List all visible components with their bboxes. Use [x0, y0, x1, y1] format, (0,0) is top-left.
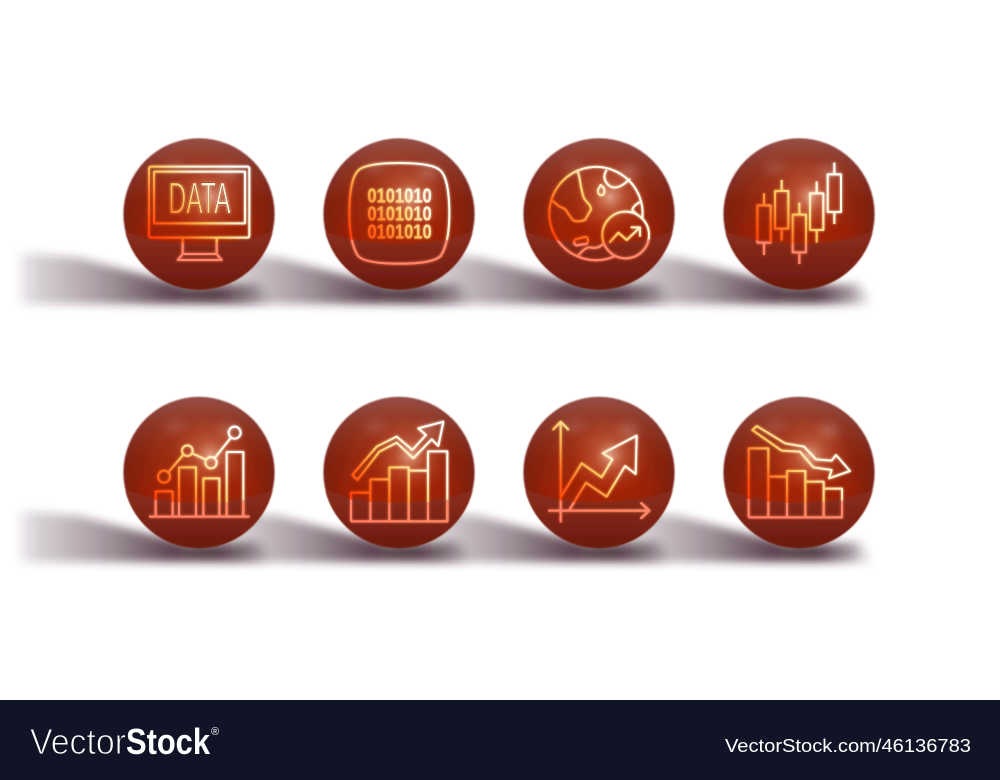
icon: globe and trend badge	[549, 167, 649, 260]
sphere: growth graph	[523, 397, 675, 548]
text: DATA: DATA	[168, 174, 231, 223]
sphere: data monitor	[123, 138, 275, 290]
icon: axes with rising arrow	[548, 422, 649, 522]
logo: VectorStock: Stock	[126, 721, 211, 762]
icon: binary squircle	[349, 163, 449, 264]
footer bar	[0, 700, 1000, 780]
text: binary digits	[367, 186, 432, 243]
icon: falling bar chart with arrow	[749, 426, 850, 517]
icon: candlesticks	[757, 163, 841, 264]
sphere: falling bars	[723, 397, 875, 548]
reference number: VectorStock.com/46136783	[725, 735, 971, 756]
logo: VectorStock	[30, 721, 219, 762]
shadows: top row	[15, 252, 873, 304]
text: binary digits: 0101010	[367, 203, 432, 225]
logo: VectorStock: ®	[211, 726, 219, 738]
sphere: globe with trend	[523, 138, 675, 290]
icon: bar and line chart	[149, 427, 249, 517]
logo: VectorStock: Vector	[30, 721, 126, 762]
shadows: bottom row	[15, 510, 873, 562]
sphere: candlestick chart	[723, 138, 875, 290]
icon: monitor with DATA	[149, 167, 249, 260]
icon: rising bar chart with arrow	[351, 422, 447, 521]
sphere: rising bars	[323, 397, 475, 548]
sphere: bars with line	[123, 397, 275, 548]
sphere: binary code	[323, 138, 475, 290]
text: binary digits: 0101010	[367, 186, 432, 208]
text: binary digits: 0101010	[367, 221, 432, 243]
